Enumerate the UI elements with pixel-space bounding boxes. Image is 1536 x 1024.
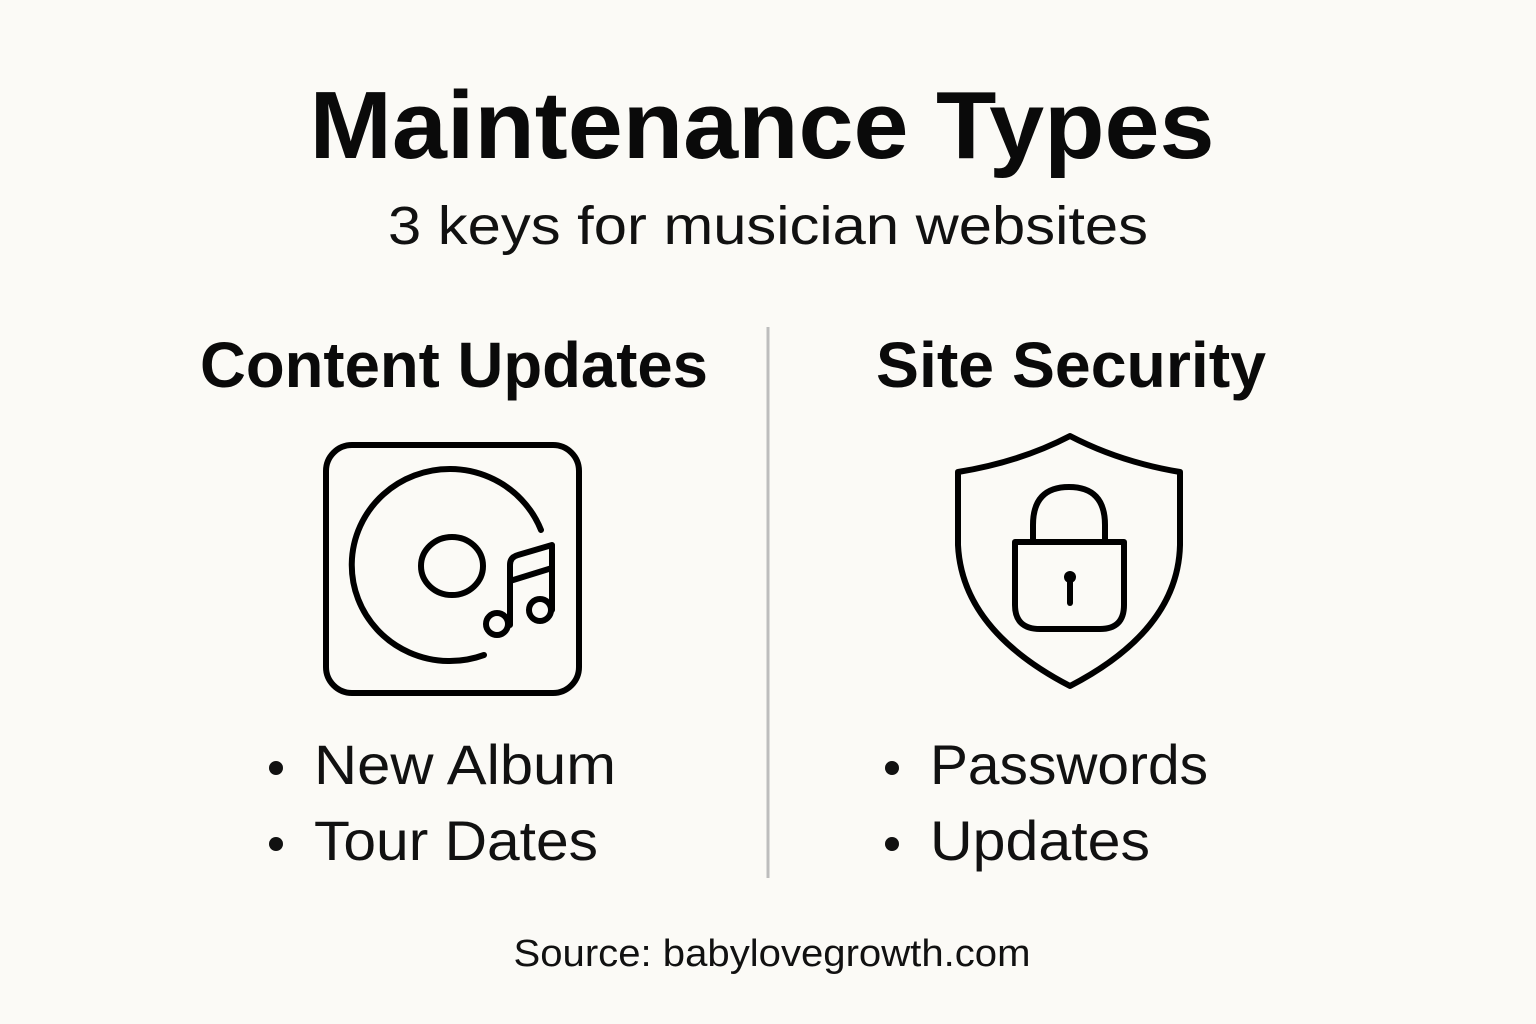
list: site security: Updates xyxy=(930,809,1150,872)
list: site security: Passwords xyxy=(930,733,1208,796)
divider xyxy=(766,327,770,878)
icon: shield with lock xyxy=(958,436,1180,686)
source: Source: babylovegrowth.com xyxy=(514,933,1030,975)
subtitle: 3 keys for musician websites xyxy=(388,196,1148,256)
list: content updates: Tour Dates xyxy=(314,809,598,872)
heading: site security: Site Security xyxy=(876,329,1266,401)
icon: album with music note xyxy=(326,445,579,693)
list: site security xyxy=(885,733,1208,872)
list: content updates xyxy=(269,733,616,872)
heading: content updates: Content Updates xyxy=(200,329,708,401)
list: content updates: New Album xyxy=(314,733,616,796)
title: Maintenance Types xyxy=(310,72,1214,179)
